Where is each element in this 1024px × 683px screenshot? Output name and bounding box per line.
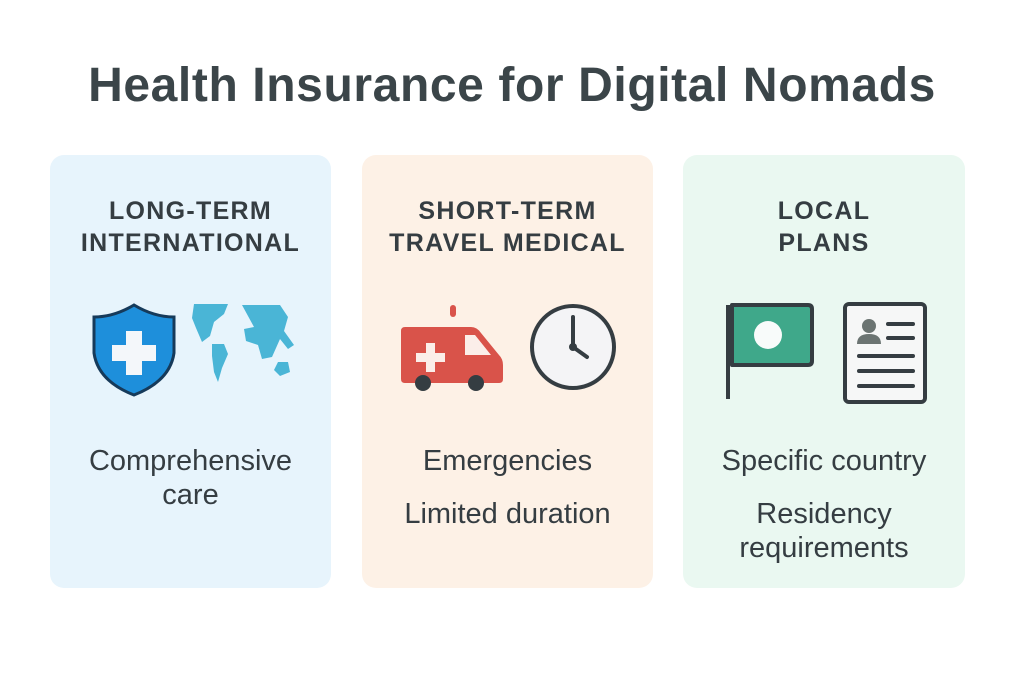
heading: PLANS	[778, 229, 870, 257]
text: Emergencies	[423, 445, 592, 477]
text: requirements	[739, 532, 909, 564]
text: Specific country	[722, 445, 926, 477]
icon: flag	[726, 303, 814, 399]
heading: LONG-TERM	[109, 197, 272, 225]
text: Limited duration	[404, 498, 611, 530]
text: Comprehensive	[89, 445, 292, 477]
icon: clock	[530, 304, 616, 390]
icon: shield	[92, 303, 176, 397]
icon: world map	[192, 304, 294, 382]
heading: SHORT-TERM	[418, 197, 597, 225]
icon: ambulance	[401, 305, 503, 391]
heading: INTERNATIONAL	[81, 229, 300, 257]
text: Residency	[756, 498, 892, 530]
heading: LOCAL	[778, 197, 870, 225]
heading: TRAVEL MEDICAL	[389, 229, 626, 257]
title: Health Insurance for Digital Nomads	[88, 59, 936, 112]
heading	[81, 197, 300, 257]
heading	[389, 197, 626, 257]
heading	[778, 197, 870, 257]
panel: local plans	[683, 155, 965, 588]
panel: short-term travel medical	[362, 155, 653, 588]
text: care	[162, 479, 219, 511]
icon: id document	[843, 302, 927, 404]
panel: long-term international	[50, 155, 331, 588]
text	[89, 445, 292, 511]
text	[739, 498, 909, 564]
